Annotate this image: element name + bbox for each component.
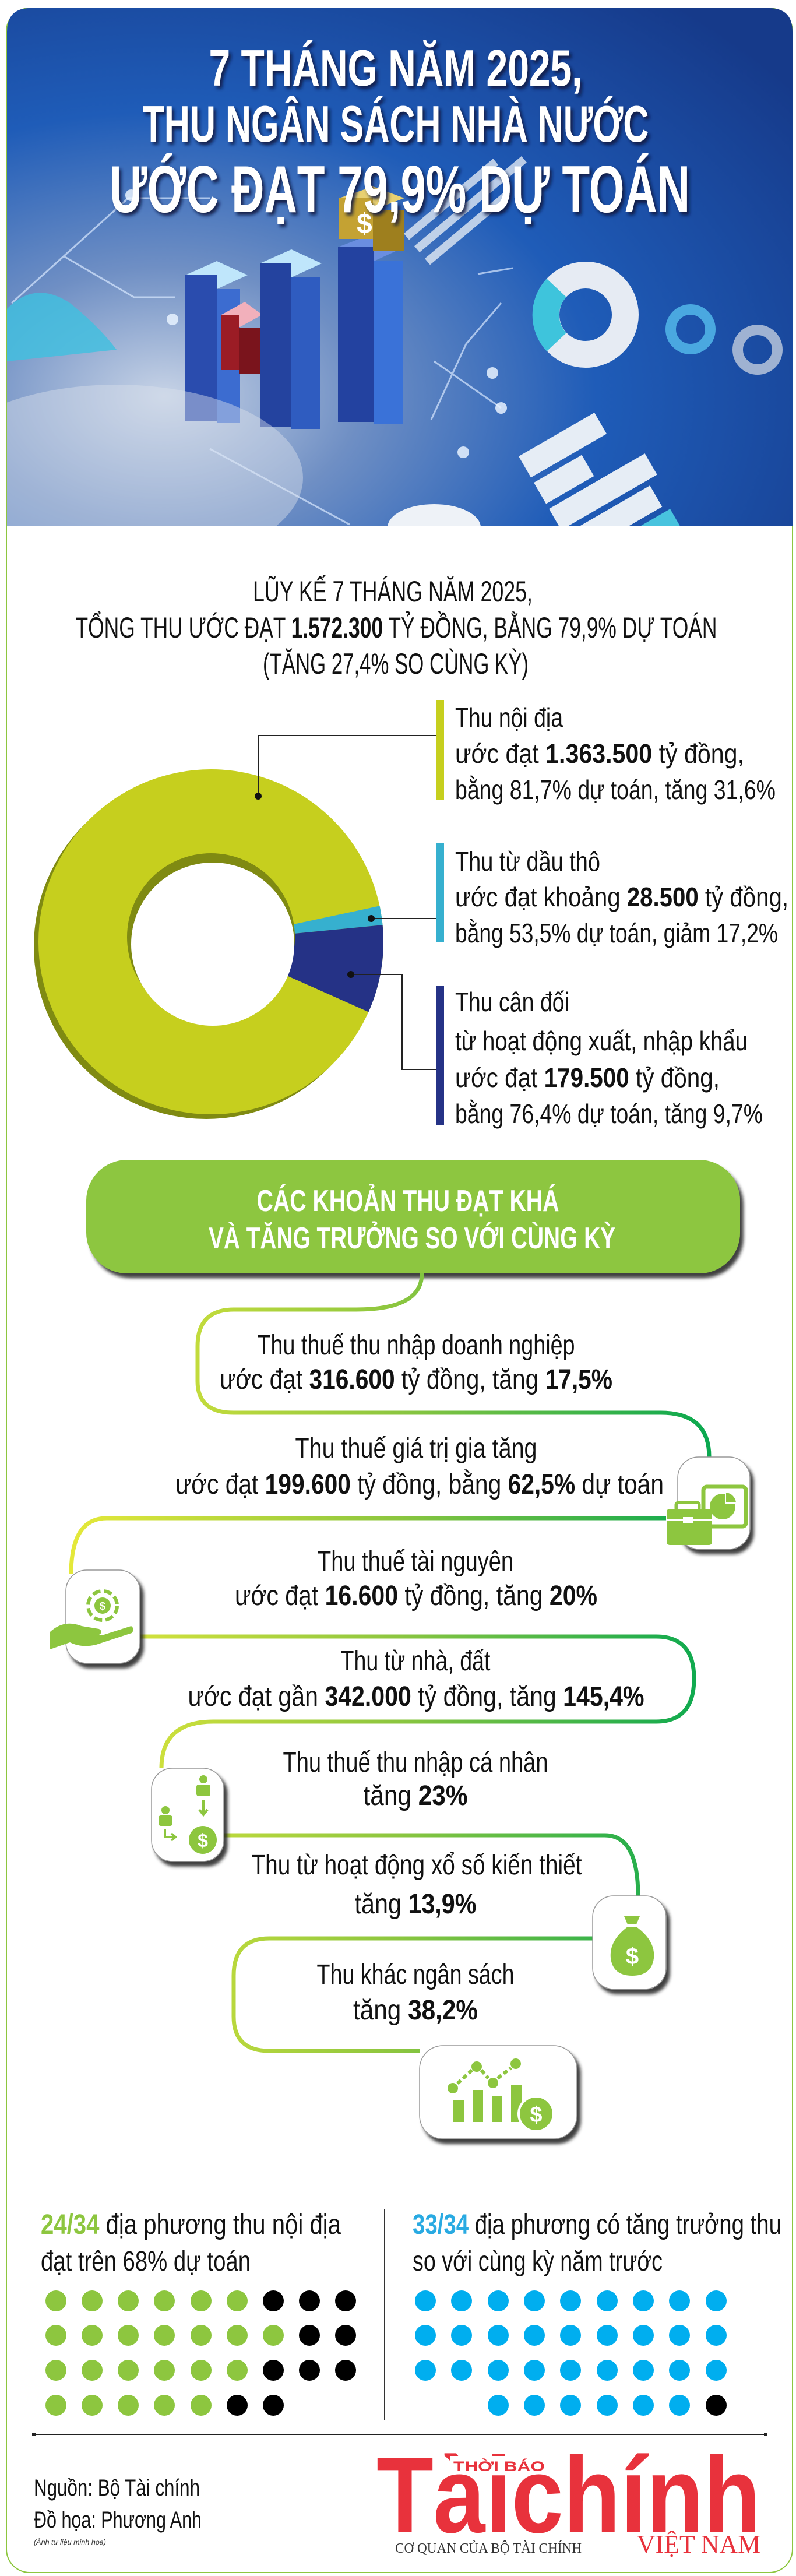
legend: xuat nhap khau: Thu cân đối <box>455 987 569 1017</box>
icon box: growth chart with coin <box>420 2046 577 2139</box>
icon box: people and money: $ <box>198 1830 208 1851</box>
item 3 text: Thu thuế tài nguyên <box>318 1546 513 1577</box>
source credits <box>34 2475 202 2546</box>
banner: cac khoan thu: VÀ TĂNG TRƯỞNG SO VỚI CÙNG KỲ <box>209 1221 615 1255</box>
legend: dau tho: Thu từ dầu thô <box>455 846 600 877</box>
icon box: people and money <box>152 1768 224 1861</box>
icon box: money bag <box>593 1896 666 1989</box>
item 4 text: Thu từ nhà, đất <box>340 1646 491 1677</box>
legend: xuat nhap khau: từ hoạt động xuất, nhập khẩu <box>455 1026 748 1056</box>
snake connector path <box>71 1273 709 2051</box>
item 5 text: tăng 23% <box>364 1780 467 1811</box>
legend: thu noi dia: Thu nội địa <box>455 702 563 733</box>
logo: Thoi bao Tai chinh Viet Nam: VIỆT NAM <box>637 2530 760 2559</box>
icon box: hand with coin <box>50 1570 140 1663</box>
dot matrix: green <box>45 2290 356 2416</box>
item 3 text <box>235 1546 597 1611</box>
item 1 text <box>220 1330 612 1395</box>
item 1 text: Thu thuế thu nhập doanh nghiệp <box>258 1330 575 1361</box>
item 1 text: ước đạt 316.600 tỷ đồng, tăng 17,5% <box>220 1364 612 1395</box>
header illustration <box>7 8 793 526</box>
item 6 text: Thu từ hoạt động xổ số kiến thiết <box>252 1850 582 1881</box>
legend: thu noi dia: ước đạt 1.363.500 tỷ đồng, <box>455 738 744 769</box>
header illustration: $ <box>357 209 372 240</box>
source credits: Đồ họa: Phương Anh <box>34 2507 202 2533</box>
icon box: money bag: $ <box>626 1944 639 1969</box>
item 3 text: ước đạt 16.600 tỷ đồng, tăng 20% <box>235 1581 597 1611</box>
summary heading: (TĂNG 27,4% SO CÙNG KỲ) <box>263 647 529 680</box>
stat: 24/34 localities <box>41 2209 356 2416</box>
source credits: Nguồn: Bộ Tài chính <box>34 2475 200 2501</box>
item 6 text <box>252 1850 582 1920</box>
legend: xuat nhap khau: ước đạt 179.500 tỷ đồng, <box>455 1062 720 1093</box>
banner: cac khoan thu <box>86 1160 740 1273</box>
dot matrix: blue <box>415 2290 727 2416</box>
item 7 text: Thu khác ngân sách <box>317 1959 514 1990</box>
stat: 33/34 localities: so với cùng kỳ năm trước <box>413 2246 663 2277</box>
summary heading: LŨY KẾ 7 THÁNG NĂM 2025, <box>253 575 533 608</box>
title <box>110 39 690 227</box>
icon box: hand with coin: $ <box>100 1600 105 1612</box>
source credits: (Ảnh tư liệu minh họa) <box>34 2538 106 2546</box>
item 5 text <box>283 1747 548 1811</box>
stat: 33/34 localities <box>413 2209 781 2416</box>
legend: thu noi dia <box>436 700 776 805</box>
icon box: growth chart with coin: $ <box>530 2103 543 2127</box>
item 5 text: Thu thuế thu nhập cá nhân <box>283 1747 548 1778</box>
legend: dau tho <box>436 843 788 948</box>
item 7 text: tăng 38,2% <box>353 1995 478 2026</box>
stat: 24/34 localities: đạt trên 68% dự toán <box>41 2246 251 2277</box>
item 2 text <box>175 1433 664 1500</box>
donut chart <box>34 736 436 1119</box>
item 4 text: ước đạt gần 342.000 tỷ đồng, tăng 145,4% <box>188 1681 644 1712</box>
stat: 24/34 localities: 24/34 địa phương thu nội địa <box>41 2209 341 2240</box>
summary heading <box>76 575 717 680</box>
logo: Thoi bao Tai chinh Viet Nam: THỜI BÁO <box>453 2458 545 2475</box>
icon box: briefcase and chart <box>667 1457 750 1549</box>
item 4 text <box>188 1646 644 1712</box>
item 7 text <box>317 1959 514 2026</box>
legend: xuat nhap khau <box>436 986 763 1129</box>
banner: cac khoan thu: CÁC KHOẢN THU ĐẠT KHÁ <box>256 1184 559 1218</box>
title: 7 THÁNG NĂM 2025, <box>209 39 583 97</box>
logo: Thoi bao Tai chinh Viet Nam: CƠ QUAN CỦA BỘ TÀI CHÍNH <box>395 2540 582 2556</box>
item 2 text: Thu thuế giá trị gia tăng <box>295 1433 537 1464</box>
item 6 text: tăng 13,9% <box>354 1889 477 1920</box>
item 2 text: ước đạt 199.600 tỷ đồng, bằng 62,5% dự toán <box>175 1469 664 1500</box>
legend: dau tho: ước đạt khoảng 28.500 tỷ đồng, <box>455 882 788 912</box>
